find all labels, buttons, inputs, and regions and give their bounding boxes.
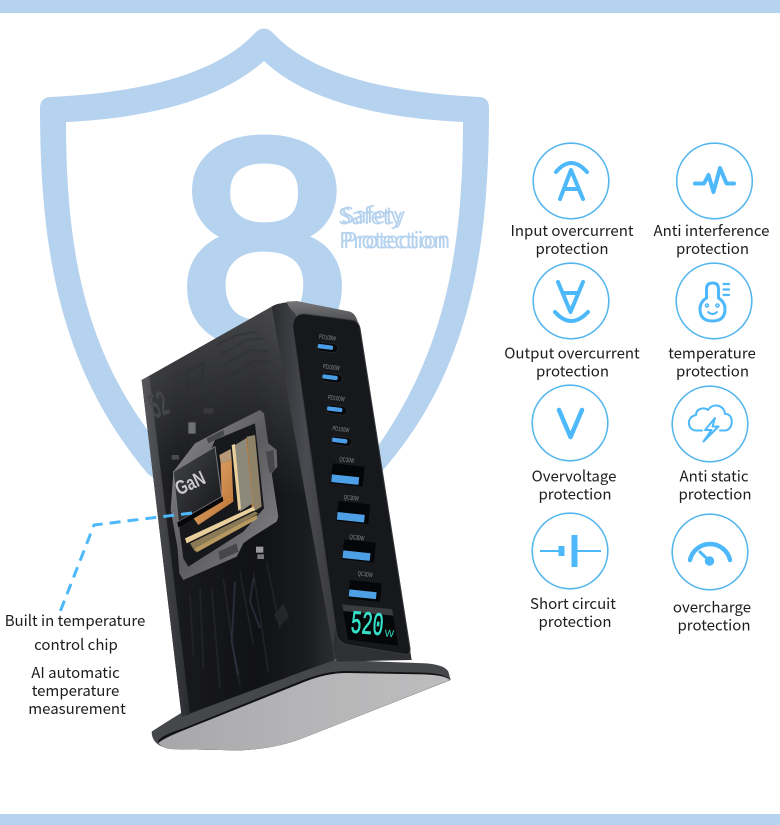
label: protection: [678, 484, 752, 504]
callout text: temperature control chip: measurement: [28, 698, 126, 719]
label: protection: [538, 484, 612, 504]
charger illustration: [142, 301, 451, 750]
icon: input current A: [556, 163, 587, 199]
GaN die: GaN: [171, 466, 209, 500]
label: protection: [676, 238, 749, 259]
side metal strip: [272, 302, 340, 660]
label: Output overcurrent: [504, 342, 640, 364]
callout text: temperature control chip: Built in temperature: [5, 610, 145, 631]
callout text: temperature control chip: AI automatic: [31, 662, 120, 683]
label: Short circuit: [530, 593, 616, 614]
top edge: [287, 301, 358, 325]
feature: overcharge: [672, 514, 751, 636]
heading: Safety Protection: [338, 198, 450, 255]
feature: overvoltage: [532, 385, 616, 504]
heading: Safety Protection: Protection: [343, 223, 450, 255]
GaN die: [171, 447, 223, 528]
callout text: temperature control chip: [5, 610, 145, 719]
port labels: [319, 334, 374, 580]
label: protection: [535, 238, 609, 259]
small board components: [172, 408, 264, 559]
chip metal frame: [171, 410, 278, 580]
pad dots: [207, 430, 275, 560]
port labels: QC30W: [339, 456, 355, 465]
copper layers: [185, 435, 262, 552]
icon: inverted A: [555, 282, 588, 321]
right front edge: [333, 322, 412, 662]
wattage display: 520: [349, 605, 385, 645]
left edge highlight: [142, 376, 190, 717]
icon: gauge: [690, 544, 730, 564]
label: Overvoltage: [532, 466, 616, 486]
icon: thermometer face: [700, 283, 729, 321]
charger side face: [142, 303, 335, 717]
port labels: PD100W: [332, 426, 350, 435]
heading: Safety Protection: Safety: [338, 199, 403, 231]
port labels: PD100W: [322, 364, 341, 373]
wattage display: [342, 604, 398, 646]
heading: Safety Protection: Safety: [341, 198, 406, 230]
icon: V: [559, 410, 582, 437]
icon: capacitor symbol: [540, 535, 601, 567]
dashed callout line: [60, 513, 192, 612]
feature: anti static: [672, 386, 752, 504]
icon: pulse: [695, 168, 734, 192]
feature: short circuit: [530, 513, 616, 632]
feature: temperature: [668, 263, 756, 382]
big number 8: 8: [179, 80, 350, 404]
top band: [0, 0, 780, 13]
port labels: QC30W: [349, 534, 365, 543]
label: temperature: [668, 342, 756, 364]
USB-A ports: [331, 463, 382, 602]
port labels: PD100W: [319, 334, 337, 343]
feature: input overcurrent: [510, 143, 634, 259]
heading: Safety Protection: Protection: [339, 223, 446, 255]
port labels: QC30W: [357, 571, 374, 580]
callout text: temperature control chip: control chip: [34, 634, 118, 655]
label: overcharge: [673, 596, 751, 618]
callout text: temperature control chip: temperature: [32, 680, 119, 701]
side face top sheen: [142, 303, 307, 555]
wattage display: W: [384, 628, 395, 640]
port labels: PD100W: [327, 395, 346, 404]
label: Input overcurrent: [510, 220, 634, 241]
feature: output overcurrent: [504, 263, 640, 382]
shield outline: [40, 28, 489, 560]
label: protection: [536, 360, 609, 382]
label: protection: [676, 360, 749, 382]
circuit traces: [187, 332, 288, 688]
GaN chip: [171, 410, 278, 580]
label: Anti interference: [654, 220, 769, 241]
front port panel: [293, 314, 410, 654]
faint 520 print on side: 52: [143, 383, 174, 426]
label: protection: [677, 614, 751, 636]
charging stand base: [152, 660, 451, 750]
USB-C ports: [317, 342, 352, 447]
feature: anti interference: [654, 143, 769, 259]
icon: cloud with lightning: [689, 405, 732, 442]
bottom band: [0, 814, 780, 825]
chip cavity: [179, 423, 264, 567]
port labels: QC30W: [343, 494, 360, 503]
label: protection: [538, 611, 612, 632]
label: Anti static: [679, 466, 749, 486]
